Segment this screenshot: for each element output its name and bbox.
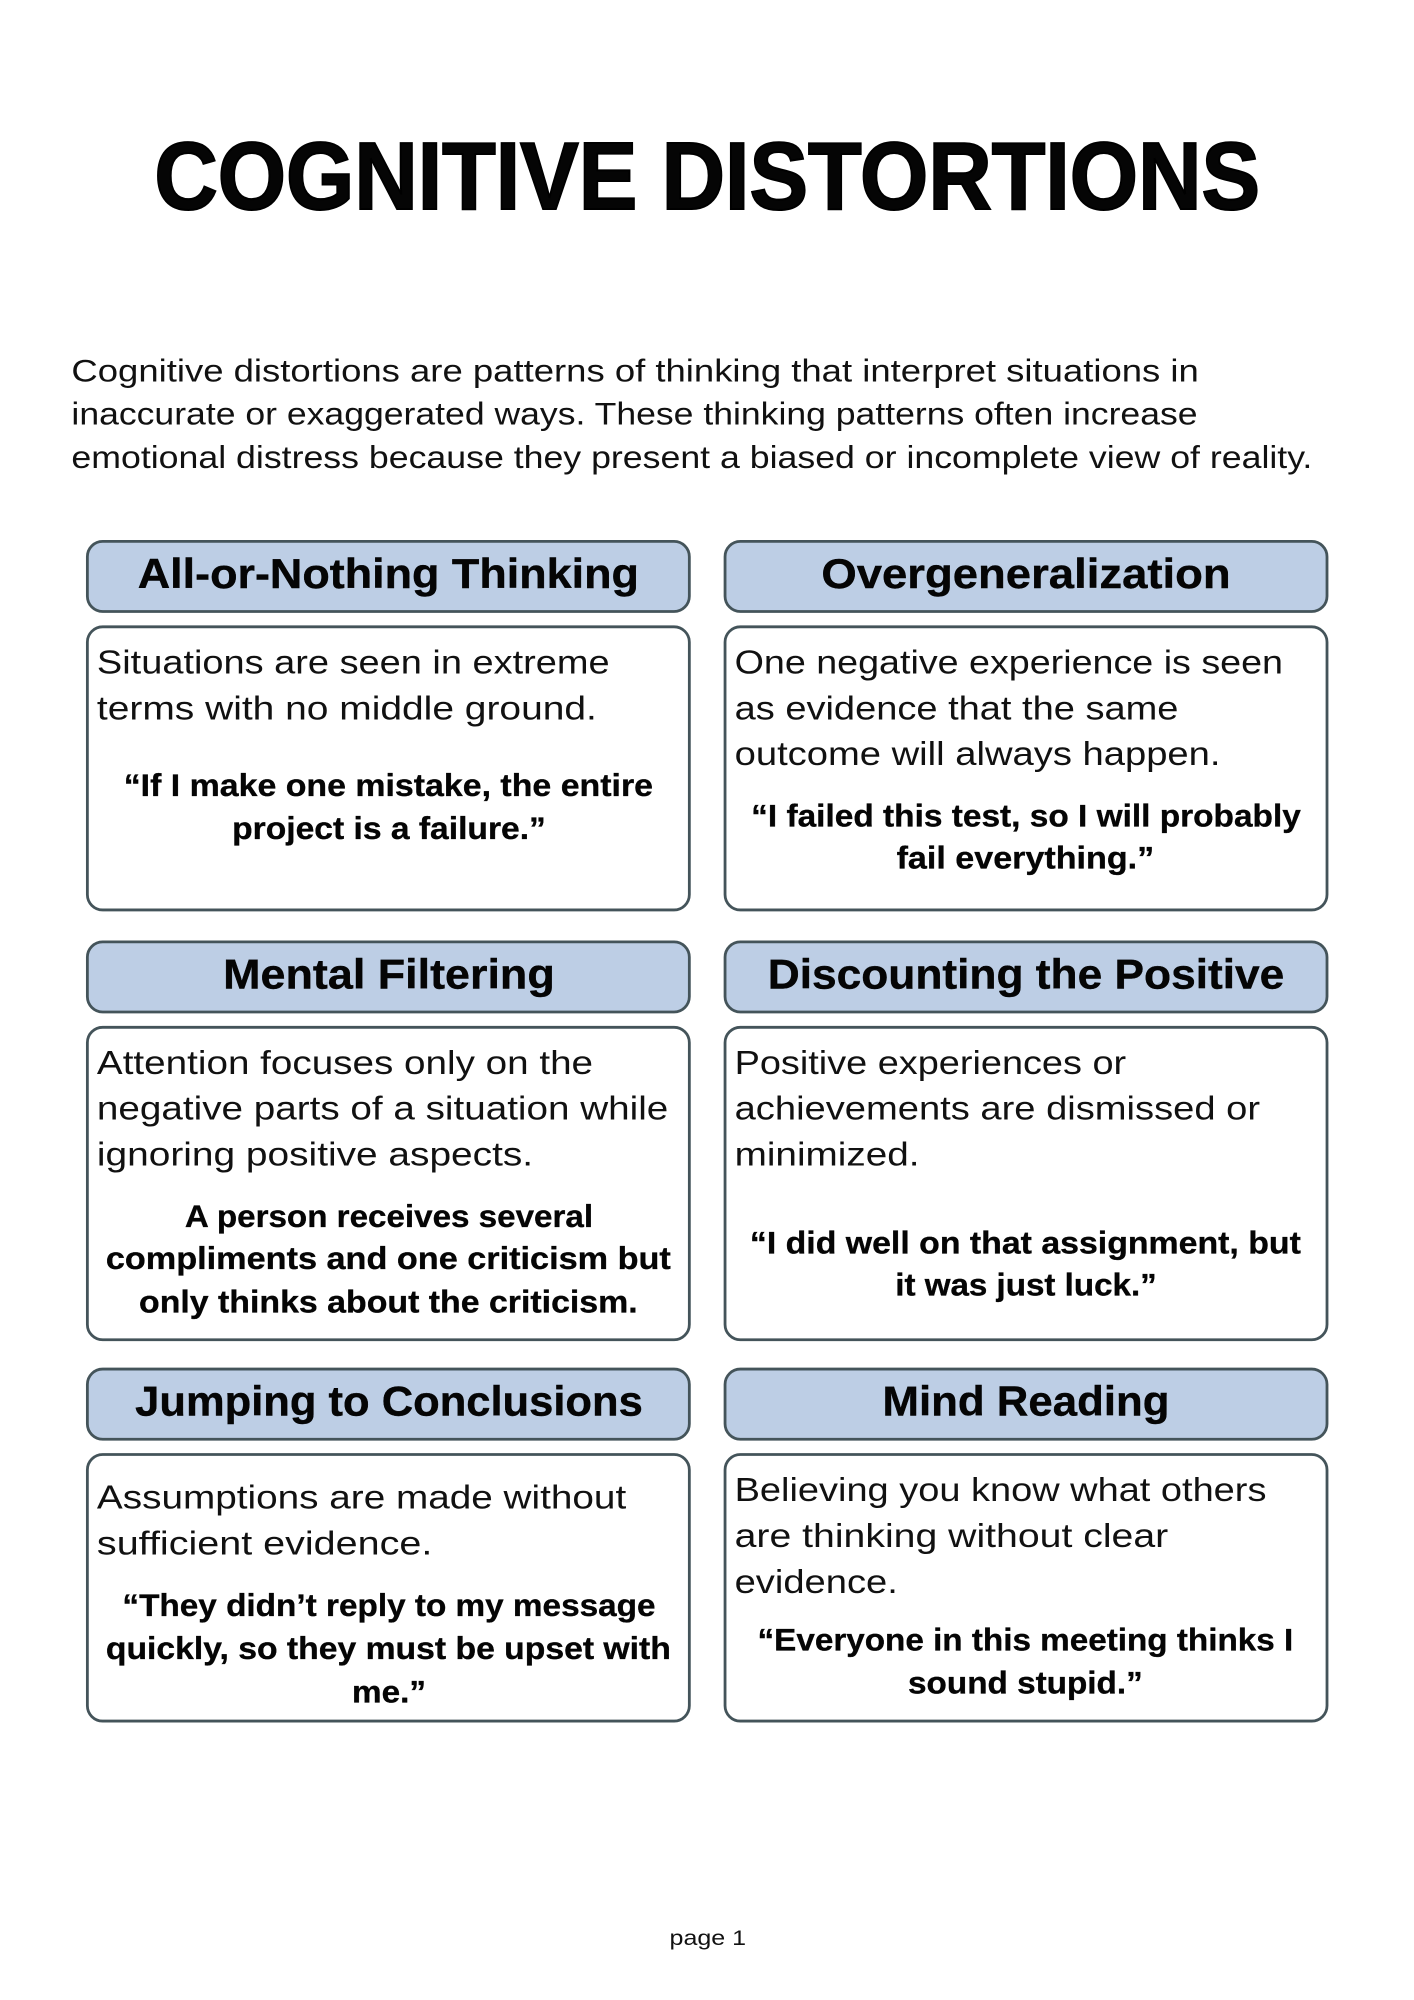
card body: All-or-Nothing Thinking: “If I make one mistake, the entire [124,768,653,803]
card body: Mental Filtering: only thinks about the criticism. [139,1284,638,1319]
panel: Jumping to Conclusions [87,1369,689,1721]
heading: Overgeneralization: Overgeneralization [821,550,1231,597]
card body: All-or-Nothing Thinking: terms with no middle ground. [97,689,597,727]
title: COGNITIVE DISTORTIONS [154,123,1260,230]
card body: Discounting the Positive [725,1027,1327,1340]
card body: All-or-Nothing Thinking [87,627,689,910]
heading: Jumping to Conclusions: Jumping to Conclusions [135,1378,643,1425]
intro paragraph: Cognitive distortions are patterns of thinking that interpret situations in [71,352,1199,388]
card body: Overgeneralization: outcome will always happen. [735,735,1221,773]
card body: Mind Reading: sound stupid.” [908,1666,1143,1701]
card body: Jumping to Conclusions [87,1455,689,1721]
panel: All-or-Nothing Thinking [87,541,689,910]
card body: Overgeneralization [725,627,1327,910]
intro paragraph: inaccurate or exaggerated ways. These thinking patterns often increase [71,396,1198,432]
heading: Mental Filtering [87,942,689,1012]
card body: Mind Reading [725,1455,1327,1721]
card body: Mind Reading: are thinking without clear [735,1517,1168,1555]
card body: Mental Filtering: A person receives several [185,1199,593,1234]
card body: Jumping to Conclusions: sufficient evidence. [97,1525,432,1563]
card body: Jumping to Conclusions: me.” [352,1675,426,1710]
card body: Mental Filtering: compliments and one criticism but [106,1241,671,1276]
heading: Discounting the Positive [725,942,1327,1012]
card body: Mental Filtering: Attention focuses only on the [97,1044,593,1082]
heading: Jumping to Conclusions [87,1369,689,1439]
card body: Discounting the Positive: “I did well on that assignment, but [750,1226,1302,1261]
card body: Mind Reading: “Everyone in this meeting thinks I [758,1622,1293,1657]
card body: Overgeneralization: fail everything.” [897,841,1154,876]
heading: Mind Reading: Mind Reading [883,1378,1170,1425]
card body: Overgeneralization: “I failed this test, so I will probably [751,798,1302,833]
card body: Overgeneralization: One negative experience is seen [735,643,1283,681]
card body: Discounting the Positive: achievements are dismissed or [735,1090,1260,1128]
panel: Discounting the Positive [725,942,1327,1340]
card body: Discounting the Positive: Positive experiences or [735,1044,1126,1082]
heading: All-or-Nothing Thinking: All-or-Nothing Thinking [138,550,639,597]
heading: Mental Filtering: Mental Filtering [223,950,555,997]
intro paragraph [71,352,1312,475]
page number: page 1 [670,1927,746,1950]
card body: Jumping to Conclusions: quickly, so they must be upset with [106,1631,671,1666]
intro paragraph: emotional distress because they present a biased or incomplete view of reality. [71,439,1312,475]
card body: Mind Reading: evidence. [735,1563,898,1601]
card body: Mental Filtering [87,1027,689,1340]
panel: Overgeneralization [725,541,1327,910]
heading: Discounting the Positive: Discounting the Positive [768,950,1284,997]
card body: Overgeneralization: as evidence that the same [735,689,1178,727]
card body: Jumping to Conclusions: “They didn’t reply to my message [122,1588,656,1623]
card body: Mental Filtering: negative parts of a situation while [97,1090,668,1128]
card body: All-or-Nothing Thinking: project is a failure.” [232,811,546,846]
card body: Mind Reading: Believing you know what others [735,1471,1266,1509]
heading: Mind Reading [725,1369,1327,1439]
card body: Jumping to Conclusions: Assumptions are made without [97,1479,627,1517]
heading: All-or-Nothing Thinking [87,541,689,612]
panel: Mental Filtering [87,942,689,1340]
heading: Overgeneralization [725,541,1327,612]
panel: Mind Reading [725,1369,1327,1721]
card body: Discounting the Positive: it was just luck.” [895,1268,1157,1303]
card body: Discounting the Positive: minimized. [735,1136,920,1174]
card body: Mental Filtering: ignoring positive aspects. [97,1136,533,1174]
card body: All-or-Nothing Thinking: Situations are seen in extreme [97,643,610,681]
